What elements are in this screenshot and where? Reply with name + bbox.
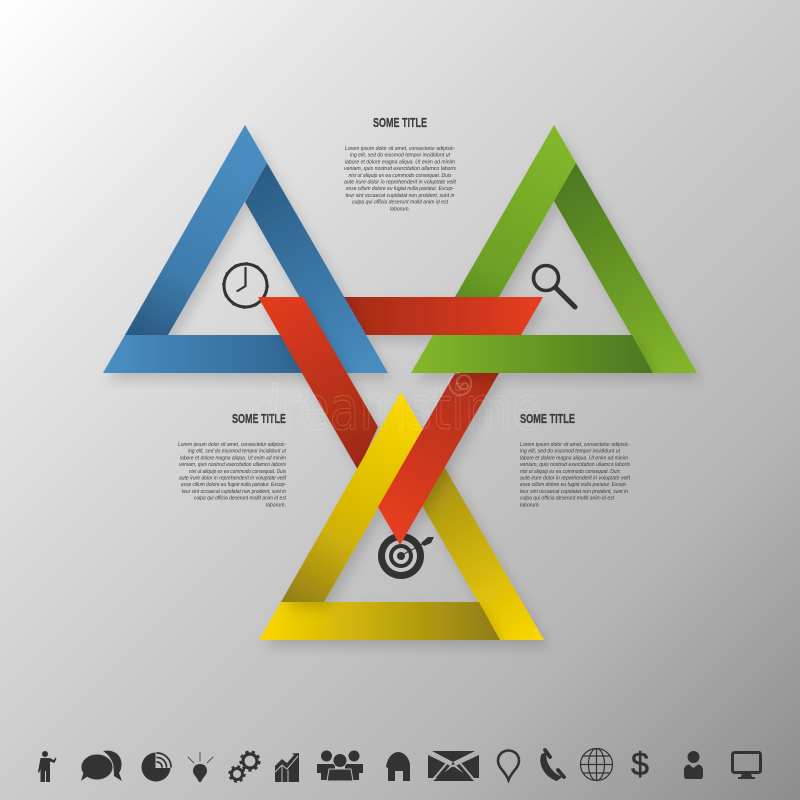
icon: phone: [540, 750, 564, 781]
icon: house: [386, 752, 410, 781]
heading: top: SOME TITLE: [373, 116, 427, 130]
text block: right: laborum.: [520, 502, 540, 508]
text block: top: esse cillum dolore eu fugiat nulla pariatur. Excep-: [346, 186, 454, 192]
text block: top: laborum.: [390, 206, 410, 212]
heading: right: SOME TITLE: [520, 412, 575, 426]
heading: left: SOME TITLE: [232, 412, 286, 426]
icon: location pin: [498, 750, 519, 780]
yellow triangle bottom band: [259, 602, 500, 640]
icon: magnifier: [534, 266, 575, 307]
icon: envelope: [426, 751, 481, 783]
icon row: [38, 746, 760, 783]
blue triangle bottom band: [103, 335, 343, 373]
blue triangle right band: [245, 163, 388, 373]
text block: right: aute irure dolor in reprehenderit in voluptate velit: [520, 476, 631, 482]
icon: monitor: [732, 752, 760, 779]
text block: right: culpa qui officia deserunt mollit anim id est: [520, 496, 614, 502]
text block: top: labore et dolore magna aliqua. Ut enim ad minim: [345, 159, 456, 165]
red triangle left band: [258, 297, 378, 470]
text block: left: nisi ut aliquip ex ea commodo consequat. Duis: [189, 469, 286, 475]
text block: right: labore et dolore magna aliqua. Ut enim ad minim: [520, 455, 629, 461]
icon: gears: [230, 752, 259, 782]
text block: right: veniam, quis nostrud exercitation ullamco laboris: [520, 462, 630, 468]
icon: dollar: $: [631, 746, 649, 782]
text block: top: nisi ut aliquip ex ea commodo consequat. Duis: [348, 173, 452, 179]
yellow triangle right band: [401, 430, 544, 640]
text block: right: teur sint occaecat cupidatat non proident, sunt in: [520, 489, 628, 495]
text block: right: nisi ut aliquip ex ea commodo consequat. Duis: [520, 469, 620, 475]
text block: left: aute irure dolor in reprehenderit in voluptate velit: [179, 476, 286, 482]
red triangle top band: [344, 297, 543, 335]
text block: left: ing elit, sed do eiusmod tempor incididunt ut: [188, 449, 286, 455]
text block: right: [520, 412, 631, 508]
text block: left: labore et dolore magna aliqua. Ut enim ad minim: [180, 455, 287, 461]
yellow triangle left band: [281, 392, 423, 602]
text block: right: ing elit, sed do eiusmod tempor incididunt ut: [520, 449, 621, 455]
text block: top: culpa qui officia deserunt mollit anim id est: [352, 200, 449, 206]
blue triangle left band: [125, 125, 267, 335]
text block: right: Lorem ipsum dolor sit amet, consectetur adipisic-: [520, 442, 630, 448]
icon: growth chart: [275, 753, 299, 782]
text block: top: Lorem ipsum dolor sit amet, consectetur adipisic-: [345, 146, 455, 152]
text block: left: laborum.: [266, 502, 286, 508]
icon: clock: [223, 263, 268, 308]
text block: top: aute irure dolor in reprehenderit in voluptate velit: [344, 180, 457, 186]
text block: right: esse cillum dolore eu fugiat nulla pariatur. Excep-: [520, 482, 627, 488]
text block: left: culpa qui officia deserunt mollit anim id est: [194, 496, 286, 502]
icon: team: [317, 750, 363, 781]
text block: left: [178, 412, 287, 508]
green triangle bottom band: [411, 335, 653, 373]
red triangle right band: [378, 373, 499, 545]
text block: top: [344, 116, 457, 212]
icon: globe: [580, 748, 612, 780]
icon: speech bubbles: [81, 751, 122, 781]
text block: left: esse cillum dolore eu fugiat nulla pariatur. Excep-: [181, 482, 286, 488]
text block: top: veniam, quis nostrud exercitation ullamco laboris: [344, 166, 456, 172]
text block: top: ing elit, sed do eiusmod tempor incididunt ut: [350, 153, 451, 159]
green triangle left band: [433, 125, 576, 335]
icon: pie chart: [142, 752, 171, 781]
text block: left: veniam, quis nostrud exercitation ullamco laboris: [179, 462, 286, 468]
icon: presenter: [38, 751, 56, 782]
text block: left: teur sint occaecat cupidatat non proident, sunt in: [182, 489, 286, 495]
watermark: dreamstime: [250, 374, 542, 444]
icon: light bulb: [188, 752, 213, 782]
icon: target with dart: [378, 533, 434, 579]
icon: user: [684, 751, 703, 779]
text block: top: teur sint occaecat cupidatat non proident, sunt in: [346, 193, 455, 199]
text block: left: Lorem ipsum dolor sit amet, consectetur adipisic-: [178, 442, 286, 448]
green triangle right band: [554, 163, 697, 373]
